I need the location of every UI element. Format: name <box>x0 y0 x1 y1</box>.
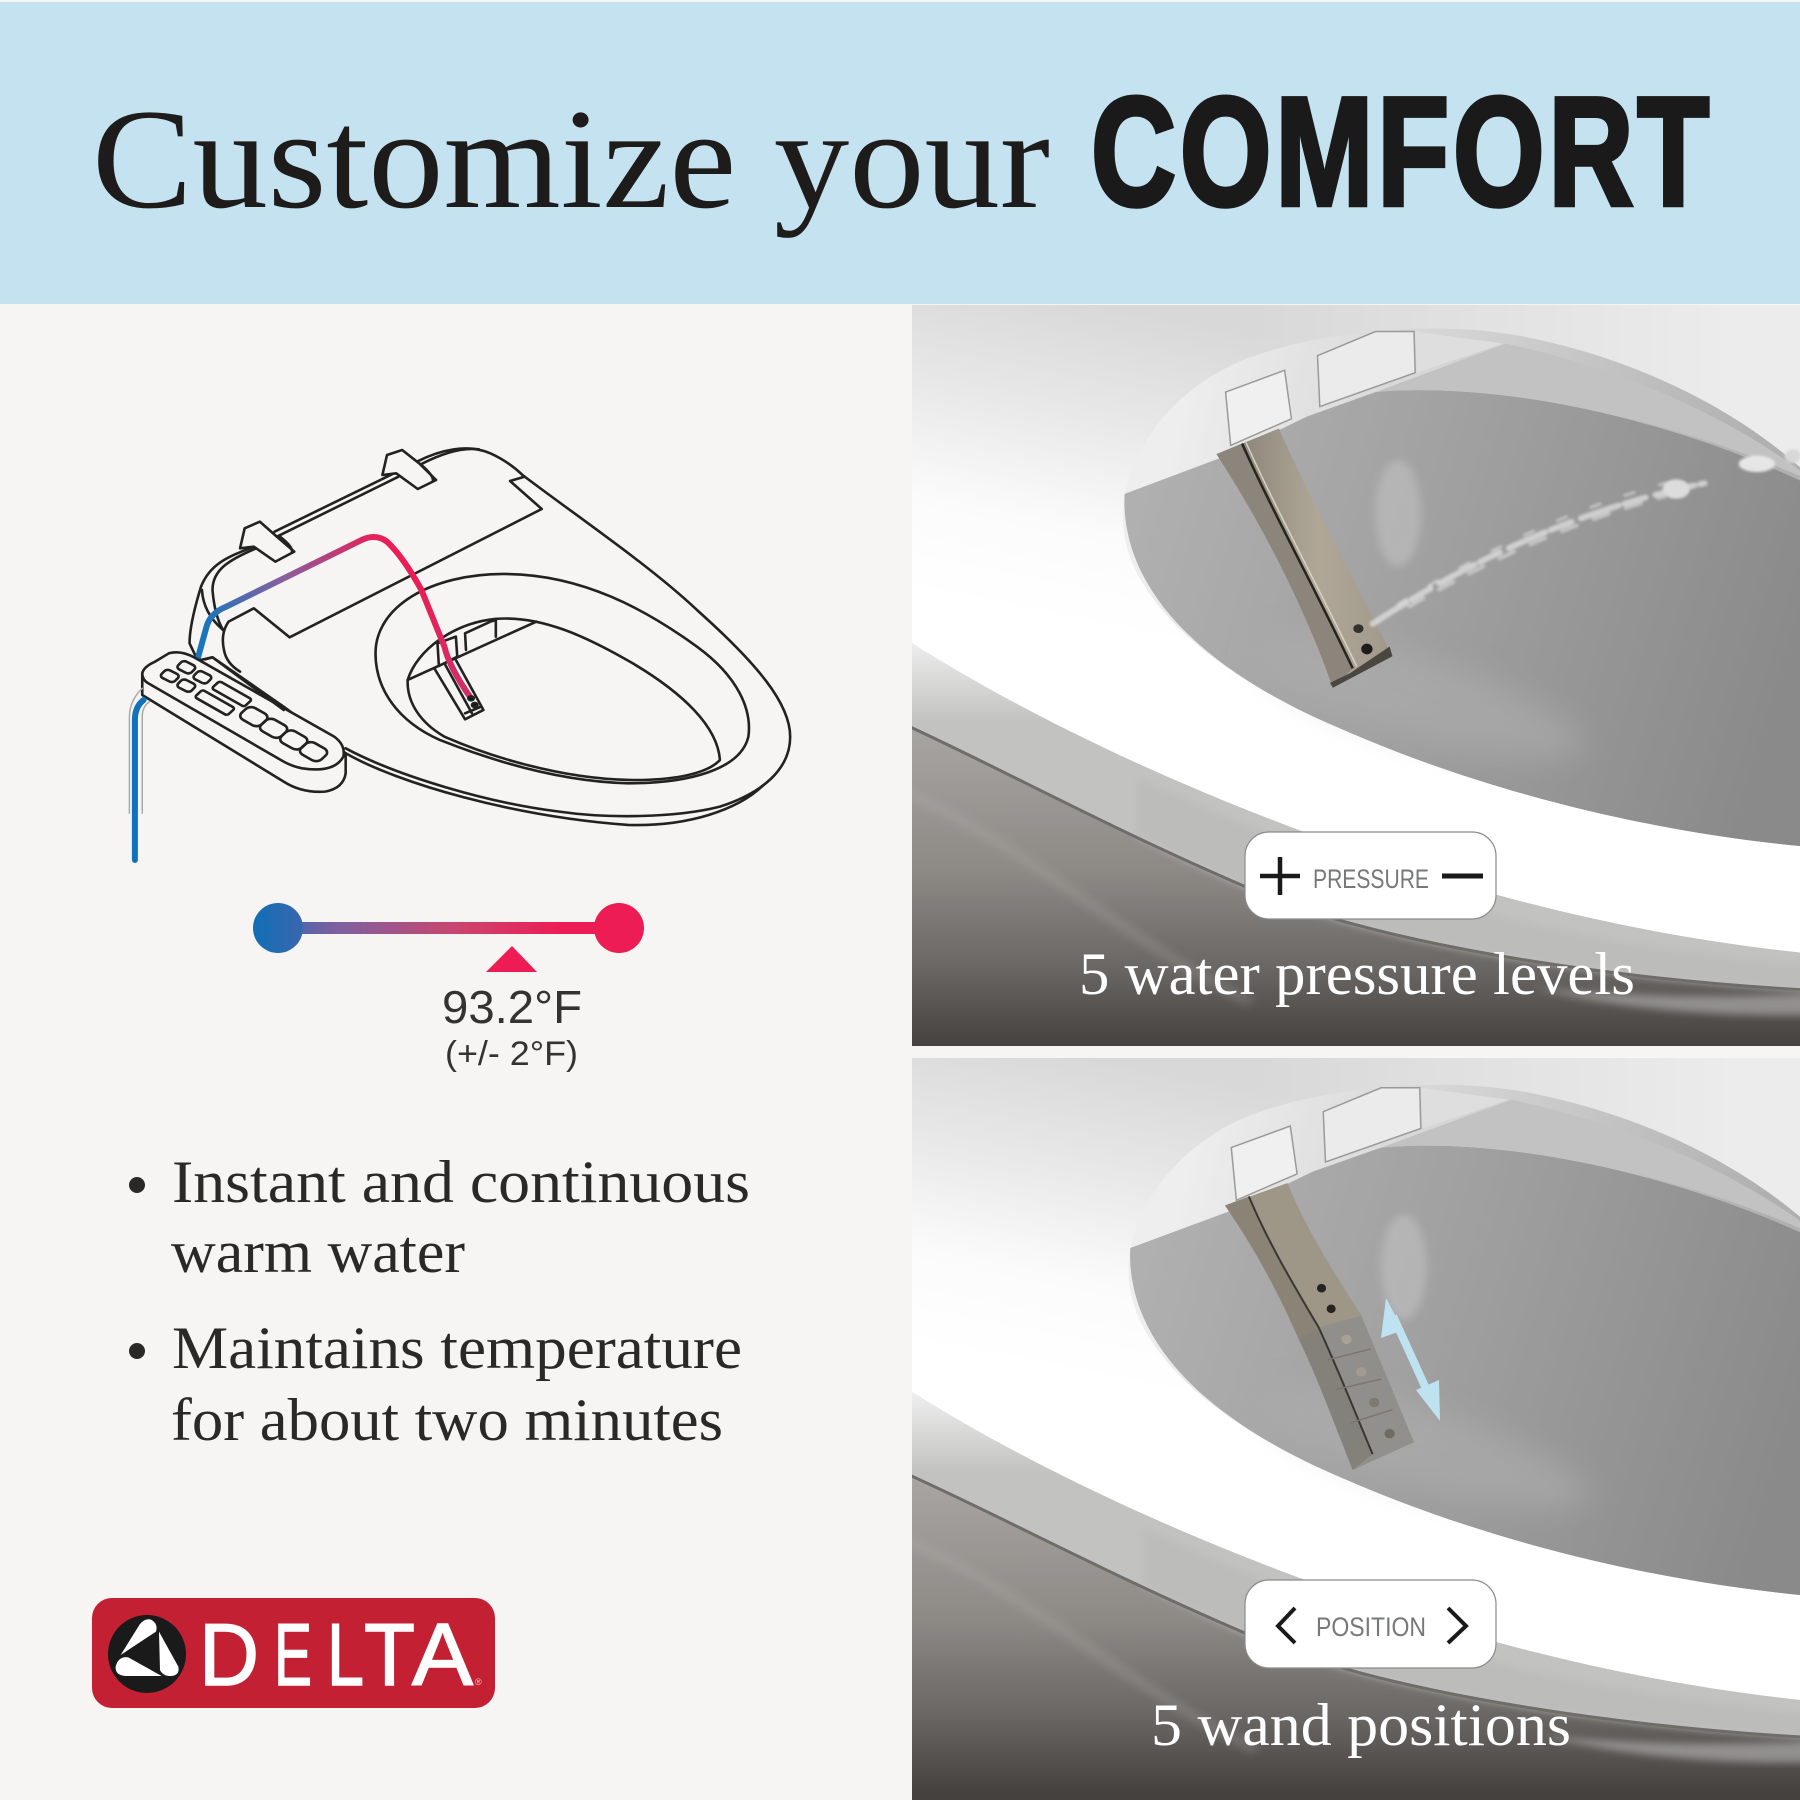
wand positions <box>1225 1183 1414 1470</box>
cold dot <box>253 903 303 953</box>
icon: minus <box>1442 874 1483 878</box>
logo: Delta <box>92 1598 495 1708</box>
wordmark: T <box>364 1605 415 1704</box>
wordmark: D <box>199 1605 259 1704</box>
marker triangle <box>486 946 537 972</box>
temperature readout <box>442 981 582 1073</box>
water jet <box>1373 449 1800 624</box>
panel: wand position photo <box>904 1047 1800 1800</box>
wand extended <box>1217 428 1392 688</box>
arrow: wand travel <box>1381 1298 1440 1421</box>
title: Customize your <box>92 80 1050 238</box>
wordmark: A <box>412 1605 473 1704</box>
water path: warm gradient <box>198 537 471 698</box>
caption: pressure: 5 water pressure levels <box>1079 941 1635 1007</box>
temperature readout: (+/- 2°F) <box>445 1035 578 1073</box>
icon: left chevron <box>1278 1608 1295 1643</box>
icon: delta triangle <box>116 1619 179 1676</box>
position button: POSITION <box>1316 1612 1426 1642</box>
bullet list <box>129 1149 750 1453</box>
photo: seat and bowl <box>912 305 1800 1046</box>
temperature readout: 93.2°F <box>442 981 582 1033</box>
hinges <box>240 450 436 562</box>
header band <box>0 2 1800 304</box>
diagram: bidet seat line drawing <box>129 448 790 860</box>
logo: Delta: ® <box>475 1677 482 1687</box>
wordmark: L <box>327 1605 364 1704</box>
pressure button: PRESSURE <box>1313 864 1429 894</box>
bullet list: for about two minutes <box>171 1387 723 1453</box>
seat outline <box>190 448 790 825</box>
title: COMFORT <box>1091 65 1713 239</box>
pressure button <box>1245 832 1496 919</box>
panel: water pressure photo <box>912 305 1800 1046</box>
wordmark <box>199 1605 473 1704</box>
temperature slider <box>253 903 644 972</box>
bullet list: Maintains temperature <box>172 1315 742 1381</box>
icon: right chevron <box>1448 1608 1466 1643</box>
wordmark: E <box>274 1605 312 1704</box>
hot dot <box>594 903 644 953</box>
caption: wand: 5 wand positions <box>1151 1692 1571 1758</box>
wand <box>434 660 483 719</box>
position button <box>1245 1580 1496 1668</box>
icon: plus <box>1260 857 1300 895</box>
water path: cold inlet <box>129 688 150 860</box>
bullet list: Instant and continuous <box>172 1149 750 1215</box>
photo: seat and bowl <box>904 1047 1800 1800</box>
bullet list: warm water <box>171 1219 465 1285</box>
control panel <box>142 652 346 792</box>
title <box>92 65 1713 239</box>
